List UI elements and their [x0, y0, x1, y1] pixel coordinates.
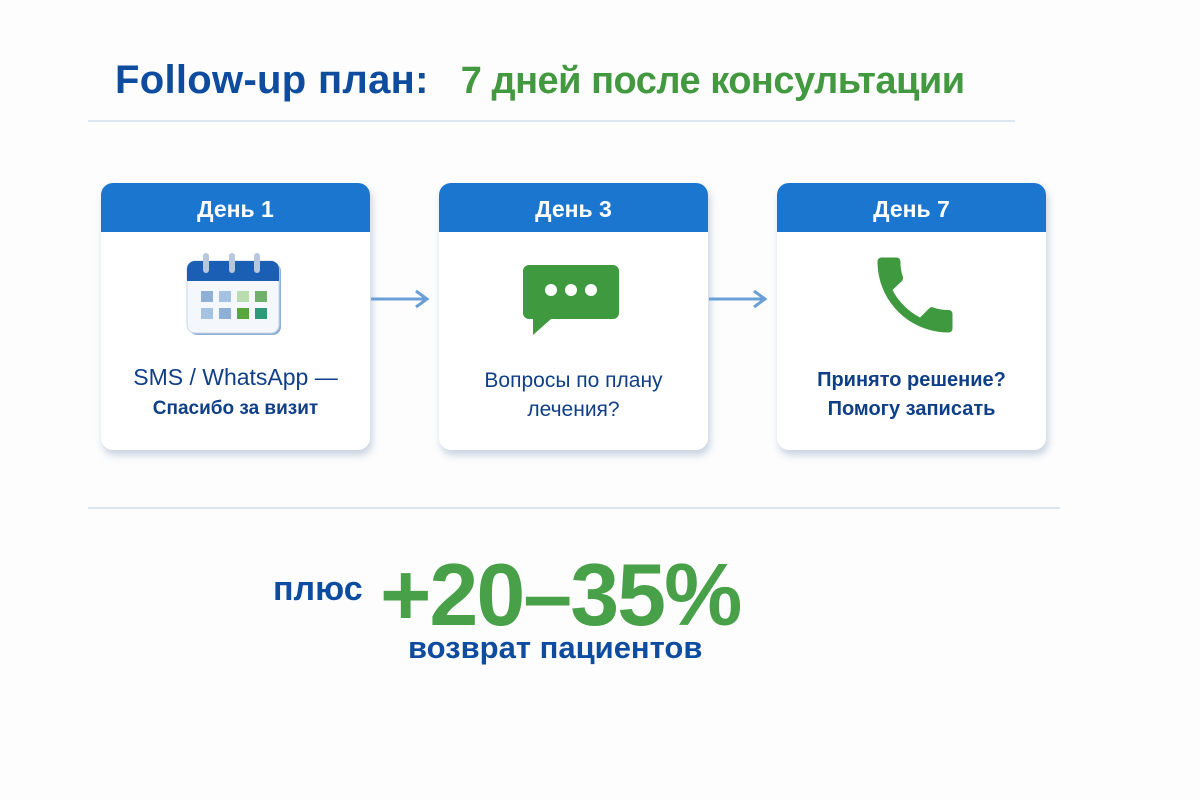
stat: caption: возврат пациентов [408, 630, 702, 665]
text: day 3: Вопросы по плану [484, 369, 663, 392]
icon: calendar [186, 253, 281, 335]
text: day 3: лечения? [527, 398, 620, 421]
stat: plus: плюс [273, 570, 363, 608]
icon: phone [878, 258, 952, 332]
card: day 3 [439, 183, 708, 450]
text: day 7: Помогу записать [828, 398, 995, 420]
text: day 1: Спасибо за визит [153, 398, 318, 419]
card: day 1 [101, 183, 370, 450]
header: day 7: День 7 [873, 196, 950, 222]
card: day 7 [777, 183, 1046, 450]
text: day 1: SMS / WhatsApp — [133, 364, 338, 390]
header: day 1: День 1 [197, 196, 274, 222]
text: day 3 [484, 369, 663, 421]
header: day 1 [101, 183, 370, 232]
header: day 3: День 3 [535, 196, 612, 222]
header: day 3 [439, 183, 708, 232]
text: day 7: Принято решение? [817, 369, 1006, 391]
stat: big number: +20–35% [380, 545, 740, 644]
header: day 7 [777, 183, 1046, 232]
icon: chat bubble [523, 265, 619, 335]
arrow 1 [371, 290, 430, 308]
title: Follow-up план: 7 дней после консультации [115, 58, 965, 102]
text: day 1 [133, 364, 338, 419]
arrow 2 [709, 290, 768, 308]
text: day 7 [817, 369, 1006, 420]
